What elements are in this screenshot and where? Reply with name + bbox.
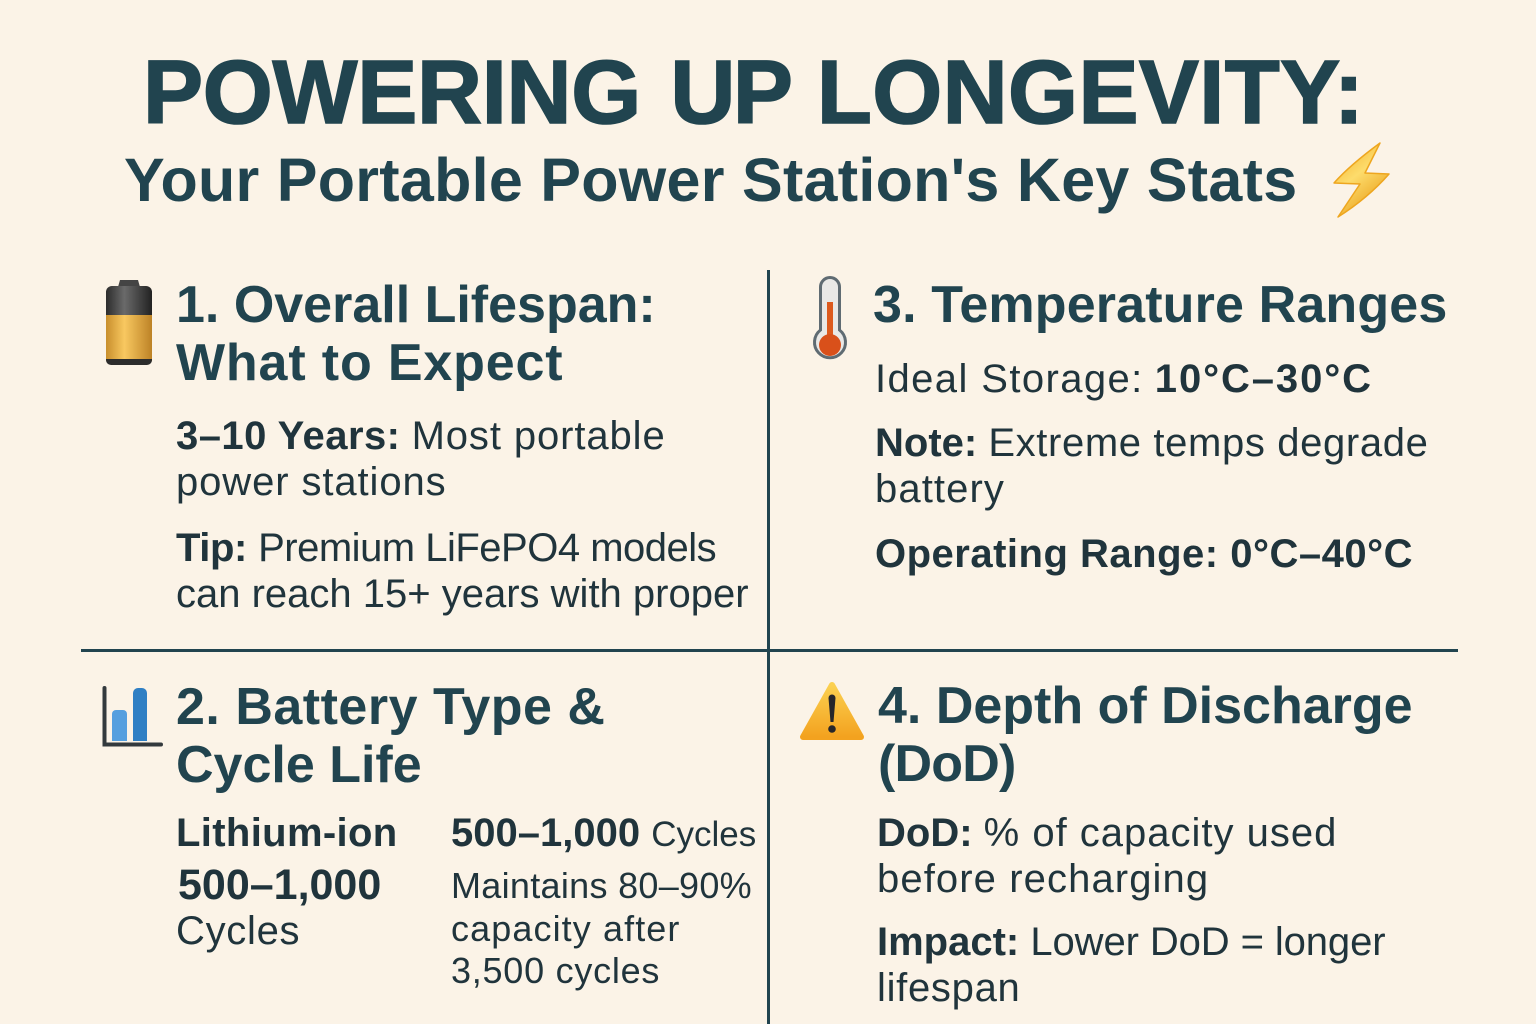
horizontal divider — [81, 649, 1458, 652]
text: lithium-ion: Lithium-ion — [176, 811, 398, 855]
text: tip: can reach 15+ years with proper — [176, 572, 749, 616]
text: ideal storage: Ideal Storage: 10°C–30°C — [875, 357, 1373, 401]
text: tip: Tip: Premium LiFePO4 models — [176, 526, 716, 570]
text: note — [875, 421, 1428, 511]
heading — [176, 276, 656, 392]
icon: lightning bolt — [1333, 142, 1390, 218]
heading — [176, 678, 605, 794]
heading: Cycle Life — [176, 736, 422, 794]
text: operating range: Operating Range: 0°C–40°C — [875, 532, 1413, 576]
heading: What to Expect — [176, 334, 563, 392]
panel: battery type — [102, 678, 756, 991]
vertical divider — [767, 270, 770, 1024]
heading: 3. Temperature Ranges — [873, 276, 1447, 334]
text: impact: lifespan — [877, 966, 1020, 1010]
panel: overall lifespan — [106, 276, 749, 616]
text: capacity: capacity after — [451, 908, 681, 948]
text: LiFePO4 cycles: 500–1,000 Cycles — [451, 811, 756, 855]
text: capacity: Maintains 80–90% — [451, 865, 752, 906]
panel: temperature ranges — [813, 276, 1447, 576]
heading: 4. Depth of Discharge — [878, 677, 1413, 735]
text: impact: Impact: Lower DoD = longer — [877, 920, 1385, 964]
text: DoD definition — [877, 811, 1337, 901]
text: note: Note: Extreme temps degrade — [875, 421, 1428, 465]
panel: depth of discharge — [800, 677, 1413, 1010]
text: years: 3–10 Years: Most portable — [176, 414, 666, 458]
text: capacity — [451, 865, 752, 991]
text: note: battery — [875, 467, 1005, 511]
text: tip — [176, 526, 749, 616]
heading: 2. Battery Type & — [176, 678, 605, 736]
text: impact — [877, 920, 1385, 1010]
text: cycles label: Cycles — [176, 909, 300, 953]
text: DoD definition: DoD: % of capacity used — [877, 811, 1337, 855]
icon: bar chart — [102, 686, 163, 746]
subtitle: Your Portable Power Station's Key Stats — [124, 146, 1297, 214]
text: capacity: 3,500 cycles — [451, 950, 660, 991]
icon: warning — [800, 682, 864, 740]
text: lithium cycles: 500–1,000 — [178, 861, 381, 909]
icon: battery — [106, 280, 152, 365]
text: years — [176, 414, 666, 504]
icon: thermometer — [813, 276, 847, 360]
title: POWERING UP LONGEVITY: — [143, 43, 1364, 143]
text: DoD definition: before recharging — [877, 857, 1209, 901]
heading: (DoD) — [878, 735, 1016, 793]
heading — [878, 677, 1413, 793]
text: years: power stations — [176, 460, 447, 504]
heading: 1. Overall Lifespan: — [176, 276, 656, 334]
